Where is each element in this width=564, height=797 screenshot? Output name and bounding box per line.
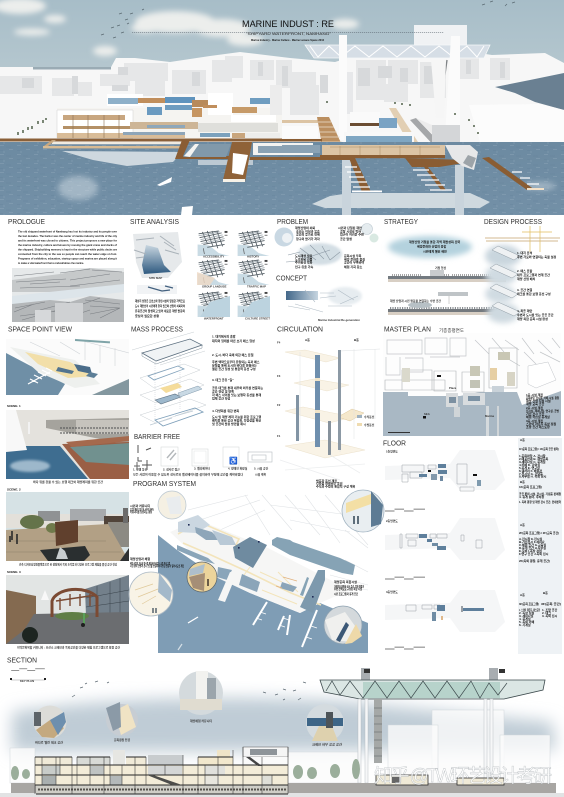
room schedule panel: 6.갤러리 F. 체험관: [519, 468, 542, 473]
axonometric drawing: [6, 339, 129, 395]
room schedule panel: A.전시장 E.전시실: [519, 536, 542, 541]
site text: 도시 해안선이 시민에게 닫혀 있으며 산업이 쇠퇴하여: [135, 303, 185, 308]
city massing: [0, 48, 564, 142]
floor 3 plan: 3층평면도: [386, 590, 398, 594]
paragraph: Programs of exhibition, education, startup space and marina are placed along it: [18, 256, 117, 260]
upper volumes: [35, 757, 72, 765]
circulation note: [316, 478, 355, 488]
problem notes: 문화시설 부족: [344, 253, 362, 258]
room schedule panel: 8.사무실 H. 옥외 전시: [519, 474, 547, 478]
room schedule panel: A동: [520, 592, 525, 597]
panel: mass process: [131, 324, 263, 426]
sky: [0, 0, 564, 146]
mass steps text: 2. 도시, 바다 축에 의한 매스 분절: [212, 352, 254, 357]
scene 2: [6, 488, 129, 566]
process steps: 1. 대지 분석: [517, 250, 532, 255]
water glints: [58, 176, 556, 200]
render: gantry plaza: [6, 575, 129, 644]
site map: [133, 232, 182, 294]
heading: PROGRAM SYSTEM: [133, 479, 196, 488]
paragraph: [18, 230, 118, 265]
subtitle: "SHIPYARD WATERFRONT, NAMHANG": [246, 32, 331, 36]
floor 2 plan: [385, 518, 505, 579]
paragraph: to make a vital waterfront that re-industrializes the marine.: [18, 261, 84, 265]
process steps: 해양 복합 문화 시설 완성: [517, 316, 548, 321]
paragraph: The old shipyard waterfront of Namhang has lost its industry and its people over: [18, 230, 118, 234]
section labels: A동: [305, 337, 310, 342]
section labels: F3: [277, 374, 281, 378]
render: rooftop plaza: [6, 492, 129, 561]
sea: [158, 535, 368, 653]
section building: [35, 747, 504, 794]
trees: [11, 759, 360, 780]
title: MARINE INDUST : RE: [242, 19, 334, 30]
room schedule panel: B동: [543, 590, 548, 595]
circulation note: 수직과 수평의 통합적 구성 계획: [316, 483, 355, 488]
plan legend: 기획 전시 공간: [526, 411, 544, 416]
problem notes: 조선소 이전과 유휴: [296, 228, 320, 234]
panel: space point view: [6, 324, 129, 395]
section labels: [277, 337, 359, 438]
heading: BARRIER FREE: [134, 432, 180, 441]
watercolor statement: 해양산업 거점을 통한 지역 재활성화 전략: [409, 239, 460, 244]
problem diagram: [274, 224, 378, 265]
heading: CONCEPT: [276, 274, 307, 282]
site text: 중심이 필요한 상황: [135, 313, 159, 318]
plan drawing: SEA: [424, 412, 430, 416]
docked ship 2: [300, 570, 325, 613]
process steps: 주변 가로와 연결되는 축을 설정: [517, 254, 556, 259]
mass steps text: [212, 334, 263, 426]
paragraph: and its waterfront was closed to citizens. This project proposes a new place for: [18, 238, 118, 242]
callout notes: [130, 503, 364, 596]
barrier free icons: [134, 445, 272, 470]
mass steps text: 입체 공간 형성: [212, 396, 230, 400]
small analysis maps: [197, 231, 270, 320]
heading: MASS PROCESS: [131, 324, 183, 334]
birds: [72, 681, 306, 700]
heading: PROLOGUE: [8, 217, 45, 226]
label: SCENE. 3: [7, 570, 21, 574]
room schedule panel: 1. 스카이 라운지, 레스토랑: [519, 607, 540, 612]
plan legend: [526, 392, 559, 429]
plan legend: 조망 공간 레스토랑: [526, 424, 550, 429]
room schedule panel: 2. 옥상 정원: [519, 610, 534, 615]
program map: [158, 495, 368, 653]
caption: 지역문화복합 커뮤니티 : 조선소 크레인과 옥외공간을 다양한 체험 프로그램으로 활용 공간: [17, 646, 120, 650]
room schedule panel: 2.매표안내 B. 해양문화: [519, 456, 548, 461]
caption: 건축 디자인상영원플랫폼으로 된 광장에서 옥외 조각품과 다양한 프로그램 체험을 즐길 공간 형성: [19, 562, 117, 566]
room schedule panel: 2. 데크: [542, 610, 551, 615]
mass steps text: 1. 대지에서의 출발: [212, 334, 236, 338]
plan legend: 1층 시설 계획: [526, 392, 543, 397]
room schedule panel: 3F(문화 공간): [541, 601, 561, 606]
room schedule panel: 5.휴게 E. 연구실: [519, 465, 540, 470]
label: SCENE. 2: [7, 488, 21, 492]
plan legend: 2층 시설 계획: [526, 405, 543, 410]
detail callout circles: [129, 490, 384, 644]
trees: [18, 101, 478, 135]
barrier free captions: 5. 시설 공간: [254, 466, 269, 470]
plaza blocks: [217, 567, 232, 580]
mass steps text: 공간 형성 및 연계: [212, 388, 234, 394]
problem notes: 해양산업의 쇠퇴: [295, 225, 315, 230]
scene 3: [6, 570, 129, 650]
room schedule panel: 1F(문화 프로그램): [519, 484, 542, 489]
site text: [135, 298, 185, 318]
callout notes: 해양문화 복합시설: [334, 579, 357, 584]
paragraph: the last decades. The harbor was the center of marine industry and life of the city: [18, 234, 117, 238]
small analysis maps: WATERFRONT: [204, 316, 224, 320]
heading: FLOOR: [383, 438, 407, 448]
hero panel: aerial view of shipyard waterfront: [0, 0, 564, 215]
room schedule panel: 7.전시실 G. 기념품: [519, 471, 543, 476]
fog background: [12, 698, 556, 752]
floor 3 plan: [385, 590, 505, 649]
problem notes: 공간이 부족하여: [344, 260, 364, 264]
ground: [11, 783, 556, 793]
small analysis maps: TRAFFIC MAP: [247, 284, 266, 288]
basements under crane: [376, 775, 428, 785]
small analysis maps: CULTURE STREET: [245, 316, 270, 320]
process steps: 해양 산업 배치: [517, 276, 535, 281]
barrier free captions: 4. 장애인 화장실: [228, 466, 248, 470]
process steps: 4. 최종 제안: [517, 308, 532, 313]
exploded mass drawing: [132, 332, 206, 426]
view circle 2: [106, 702, 138, 742]
watermark: 知乎 @TW环艺设计考研: [374, 765, 552, 787]
heading: CIRCULATION: [277, 324, 323, 334]
heading: [384, 324, 464, 334]
mass steps text: 배치를 통한 공간 복합화, 다양성을 확보: [212, 418, 261, 422]
heading: PROBLEM: [277, 217, 308, 226]
plan legend: 3층 시설 계획: [526, 418, 543, 423]
process steps: 3. 공간 연결: [517, 287, 532, 292]
background buildings: [10, 710, 550, 783]
view circle 4: 크레인 하부 공공 공간: [312, 742, 342, 746]
callout notes: 해양 산업의 기술과 역사를 체험하며 배우는 교육 프로그램: [130, 560, 170, 566]
room schedule panel: 4.카페 D. 강의실: [519, 462, 540, 467]
room schedule panel: 6. 기계실: [519, 622, 531, 627]
problem notes: 인구 유출 가속: [295, 264, 313, 269]
heading: DESIGN PROCESS: [484, 217, 542, 226]
callout notes: 크레인과 연계한 전시 공간, 문화 광장과: [334, 584, 364, 588]
concept diagram: Marine Industrial Re-generation: [318, 318, 360, 322]
docked ship 1: [272, 537, 355, 575]
process steps: 내부 프로그램과 연계 공간: [517, 272, 550, 277]
heading: MASTER PLAN: [384, 324, 431, 334]
icon: wheelchair: ♿: [229, 456, 238, 465]
room schedule panel: 2F(옥외 광장, 휴게 공간): [519, 558, 550, 563]
mass steps text: 3. 데크 공유 "길": [212, 377, 234, 382]
heading: SECTION: [7, 656, 37, 664]
west waterfront complex: [57, 85, 282, 139]
problem notes: 도시재생 필요: [295, 253, 313, 258]
paragraph: the shipyard. Shipbuilding memory is kept in the structure while public decks are: [18, 248, 117, 252]
view circle 4: [306, 704, 344, 746]
watercolor statement: [388, 236, 472, 258]
panel: concept: [276, 274, 362, 322]
problem notes: 항구의 활기가 저하: [296, 236, 320, 241]
panel: prologue: [8, 217, 124, 322]
section labels: F4: [277, 340, 281, 344]
view circle 2: 문화광장 전경: [114, 738, 130, 742]
mass steps text: 각 매스 사이를 잇는 보행자 동선을 통해: [212, 392, 261, 397]
room schedule panel: 2F(문화 프로그램) / 2F(교육 공간): [519, 530, 559, 535]
structure lines: [35, 757, 288, 794]
heading: 기층층평면도: [439, 327, 464, 334]
floor 2 plan: 2층평면도: [386, 519, 398, 523]
view circle 3: [179, 671, 223, 723]
panel: site analysis: [130, 217, 270, 320]
mass steps text: 주변 맥락으로부터 유입되는 축과 매스: [212, 359, 260, 364]
process steps: 2. 매스 분할: [517, 268, 532, 273]
escalator: [147, 775, 182, 785]
barrier free captions: [133, 466, 269, 476]
plan drawing: [383, 333, 561, 436]
title block: [132, 19, 444, 42]
panel: program system: [129, 479, 384, 653]
paragraph: connected from the city to the sea so people can reach the water edge on foot.: [18, 252, 117, 256]
watercolor statement: 시민에게 열린 해안: [423, 248, 447, 254]
panel: design process: [484, 217, 560, 323]
callout notes: 공공의 열린 공간으로 시민이 머무는: [130, 506, 154, 512]
problem notes: 접근이 어려운 수변: [340, 232, 364, 236]
dark main block: [233, 537, 267, 568]
process steps: [485, 245, 556, 323]
panel: problem: [274, 217, 378, 269]
label: SCENE. 1: [7, 404, 21, 408]
water reflections: [62, 151, 490, 215]
piers: [218, 572, 237, 602]
callout notes: 해양산업과 체험: [130, 556, 150, 561]
problem notes: 공간의 증가로 인해: [296, 232, 320, 236]
view circle 1: [34, 706, 66, 744]
barrier free captions: 2. 경사로 접근: [163, 468, 180, 472]
panel: floor plans: [383, 437, 562, 654]
circulation note: 방문자 동선 계획: [316, 478, 337, 483]
barrier free captions: 모든 사람이 이용할 수 있도록 경사로와 엘리베이터를 설치하여 무장애 공간을 계획하였다: [133, 472, 243, 476]
callout notes: 시민 참여 공방과 전시 공간을 연결하여 다양한 활동이 일어나도록 계획: [130, 563, 184, 568]
mass steps text: 열린 공간 형성 및 통합적 동선 구성: [212, 366, 256, 371]
plan legend: 해양 교육 공간: [526, 401, 544, 406]
room schedule panel: A동: [520, 437, 525, 442]
small analysis maps: ACCESSIBILITY: [203, 254, 224, 258]
plan legend: 체험 학습실 휴게실: [526, 414, 550, 419]
birds: [101, 1, 515, 38]
problem notes: 공간 발생: [340, 236, 352, 241]
room schedule panel: 5. 옥외 카페: [519, 619, 534, 624]
room schedule panel: 3F(문화 프로그램): [519, 601, 539, 606]
section labels: F1: [277, 434, 281, 438]
problem notes: 시민과 단절된 해안: [338, 225, 362, 230]
strategy section 2: 해양 산업과 시민 활동을 연결하는 수변 공간: [390, 299, 441, 303]
plan legend: 전시실, 세미나실, 연구실, 공방: [526, 408, 559, 413]
gantry crane: [320, 668, 545, 783]
scale and key: [10, 669, 46, 683]
heading: STRATEGY: [384, 217, 418, 226]
room schedule panel: 3. 세미나실: [519, 613, 534, 618]
room schedule panel: [518, 437, 562, 654]
plan drawing: Marina: [485, 414, 494, 418]
room schedule panel: F.연구 공간 J.옥외 전시: [519, 551, 549, 556]
barrier free captions: 시설 계획: [255, 472, 266, 476]
room schedule panel: A동: [520, 522, 525, 527]
room schedule panel: 3. 옥외 전시: [542, 613, 557, 618]
tall white tower: [414, 25, 467, 45]
room schedule panel: 4. 휴게 쉼터, 주차장: [519, 494, 544, 499]
exploded circulation diagram: 수직동선: [364, 415, 375, 419]
room schedule panel: D.휴게 공간 H.사무실: [519, 545, 546, 550]
plan legend: 스카이 라운지 옥상 정원: [526, 421, 556, 426]
problem notes: 해양 문화를 즐길: [344, 256, 365, 262]
room schedule panel: 4. 휴게실: [519, 616, 531, 621]
floor 1 plan: 1층평면도: [386, 450, 398, 454]
barrier free captions: 1. 보행 동선: [133, 468, 148, 472]
problem notes: 노후화된 건물: [295, 256, 313, 262]
scene 1: [6, 404, 129, 484]
process steps: 데크를 통한 보행 동선 구성: [517, 291, 551, 296]
central deck stair and east block: [282, 108, 460, 150]
plan legend: 해양 산업 지원 시설: [526, 398, 551, 403]
room schedule panel: 1. 조망 공간: [542, 607, 557, 612]
heading: _: [432, 325, 438, 334]
distant water to the right: [495, 73, 564, 110]
section labels: F2: [277, 403, 281, 407]
room schedule panel: B.기획전시 F.세미나: [519, 539, 545, 544]
main floors: [35, 765, 288, 785]
heading: SITE ANALYSIS: [130, 217, 179, 226]
section labels: B동: [354, 337, 359, 342]
heading: SPACE POINT VIEW: [8, 324, 73, 334]
mass steps text: 및 공간의 활용 방안을 제시: [212, 421, 246, 426]
panel: strategy: [384, 217, 506, 315]
mass steps text: 분절을 통해 도시와 바다를 연결하는: [212, 362, 257, 368]
room schedule panel: B동: [520, 479, 525, 484]
paragraph: the marine industry, culture and leisure by reusing the giant crane and docks of: [18, 243, 117, 247]
site axis sketch: [485, 226, 560, 252]
land and paths: [170, 520, 350, 613]
sea: [0, 142, 564, 215]
problem notes: 체험 기회 감소: [344, 264, 362, 269]
room schedule panel: E.로비 I.옥상 정원: [519, 548, 542, 553]
circulation note: 각층을 연결하는 동선: [316, 481, 343, 486]
exploded circulation diagram: 수평동선: [364, 423, 375, 427]
watercolor statement: 해양문화와 산업의 융합: [417, 244, 447, 248]
image: sketch of harbor: [12, 268, 124, 322]
exploded circulation diagram: [280, 349, 380, 480]
panel: master plan: [383, 324, 561, 436]
mass steps text: 공유 데크를 통해 내부와 외부를 연결하는: [212, 385, 263, 390]
plan drawing: Plaza: [449, 386, 457, 390]
callout notes: 시민 프로그램과 휴게 공간: [334, 591, 358, 596]
site map: SITE MAP: [149, 276, 162, 280]
scale and key: KEY PLAN: [20, 679, 34, 683]
room schedule panel: 3.세미나실 C. 휴게실: [519, 459, 546, 464]
strategy section 1: 거점 형성: [435, 266, 446, 270]
barrier free captions: 3. 엘리베이터: [194, 466, 210, 470]
process steps: 수변과 도시를 잇는 공공 공간: [517, 312, 554, 317]
gantry crane: [305, 35, 490, 140]
site text: 대상지 남항은 조선소와 항만시설이 밀집한 지역으로: [135, 298, 185, 303]
basement: [36, 785, 288, 794]
mass steps text: 대지의 형태를 따른 초기 매스 형성: [212, 338, 255, 343]
view circle 3: 해양체험 커뮤니티: [190, 719, 212, 723]
mass steps text: 도시 및 해양 레저 기능을 위한 프로그램: [212, 414, 261, 419]
problem notes: 공장 시설로 막혀: [340, 228, 361, 234]
small analysis maps: GROUP LANDUSE: [202, 284, 227, 288]
callout notes: 커뮤니티를 형성하는 광장: [130, 509, 152, 514]
brown boardwalks and basins: [0, 138, 544, 215]
room schedule panel: C.체험 공간 G.교육실: [519, 542, 546, 547]
room schedule panel: 1.문화마당 A. 전시장: [519, 453, 546, 458]
site text: 유휴공간이 발생하고 있어 새로운 해양 활동의: [135, 308, 185, 313]
panel: section: [0, 656, 564, 797]
small analysis maps: HISTORY: [247, 254, 259, 258]
problem notes: 주거환경 악화: [295, 260, 313, 264]
callout notes: 시민과 커뮤니티: [130, 503, 150, 508]
clouds: [0, 0, 359, 56]
view circle 1: 바다로 열린 데크 공간: [35, 740, 63, 744]
authors: Marine Industry · Marine Culture · Marine Leisure Space 2016: [251, 39, 325, 42]
callout notes: 수변 산책로로 구성된 복합 시설: [334, 586, 362, 591]
problem notes: [295, 225, 365, 269]
caption: 바다 위를 걷을 수 있는 보행 데크와 해양레저를 위한 공간: [33, 480, 103, 484]
panel: barrier free: [133, 432, 272, 476]
floor 1 plan: [385, 450, 505, 511]
mass steps text: 4. 다양화를 위한 변화: [212, 408, 239, 413]
render: boardwalk and basin: [6, 410, 129, 479]
panel: circulation: [277, 324, 380, 488]
